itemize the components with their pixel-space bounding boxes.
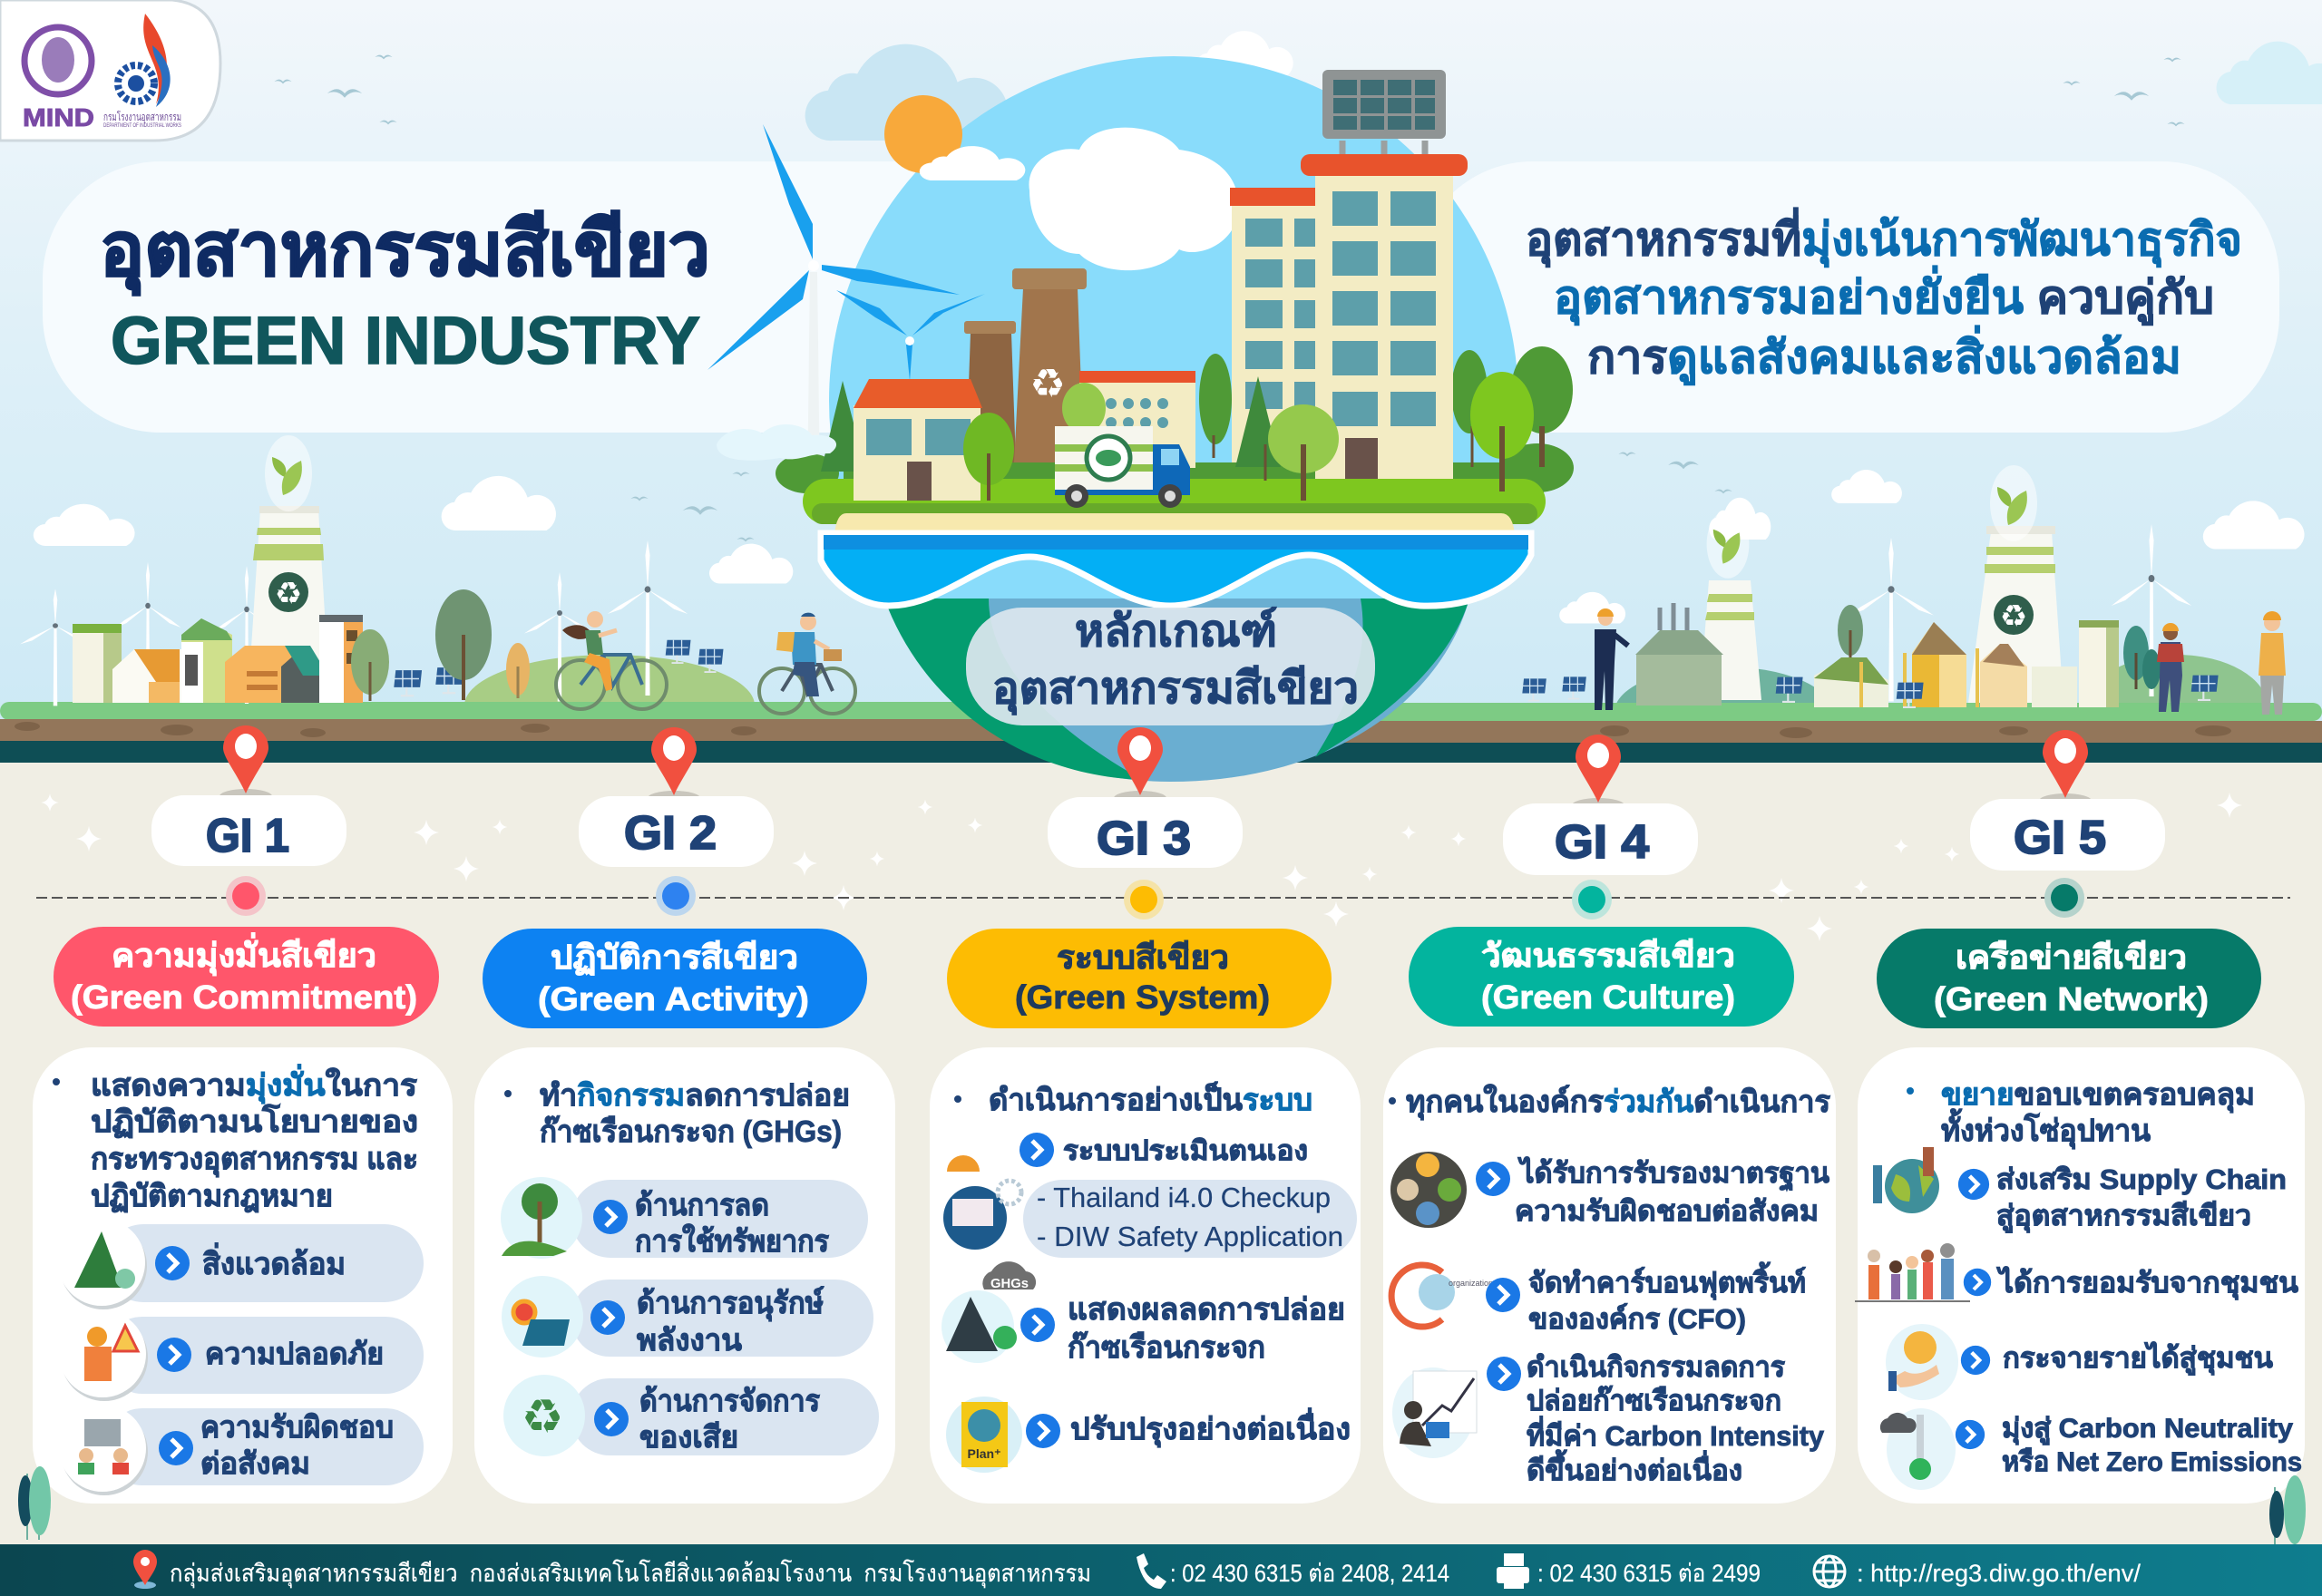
worker woman — [2157, 623, 2184, 712]
right cooling tower: ♻ — [2000, 598, 2027, 635]
right town illustration — [1522, 465, 2286, 715]
row: supply chain: สู่อุตสาหกรรมสีเขียว — [1996, 1200, 2251, 1233]
trees foreground — [963, 372, 1542, 501]
decorative tree right — [2269, 1475, 2306, 1549]
header: Green System — [947, 929, 1332, 1028]
department name — [103, 111, 181, 129]
department name: DEPARTMENT OF INDUSTRIAL WORKS — [103, 123, 181, 129]
wind turbine large — [707, 124, 960, 490]
globe bottom earth — [884, 598, 1469, 782]
title panel pill — [43, 161, 1040, 433]
row: energy conservation: พลังงาน — [637, 1323, 742, 1357]
row: income distribution: กระจายรายได้สู่ชุมชน — [2003, 1341, 2273, 1376]
GI 5 intro text: ทั้งห่วงโซ่อุปทาน — [1941, 1108, 2151, 1150]
row: waste management: ของเสีย — [639, 1420, 738, 1454]
row: GHG reduction results: แสดงผลลดการปล่อย — [1068, 1292, 1345, 1326]
title heading — [100, 209, 710, 378]
description text: อุตสาหกรรมที่มุ่งเน้นการพัฒนาธุรกิจ — [1526, 208, 2242, 268]
row: supply chain — [1873, 1147, 2287, 1233]
icon: ministry seal — [24, 27, 92, 94]
description text — [1526, 208, 2242, 385]
cyclist woman — [556, 611, 667, 709]
footer bar — [0, 1544, 2322, 1596]
GI label pills — [151, 795, 2165, 875]
row: resource reduction: การใช้ทรัพยากร — [635, 1223, 829, 1258]
panel: GI 5 card — [1855, 1047, 2305, 1504]
header: Green Activity: (Green Activity) — [538, 980, 809, 1017]
worker engineer — [2259, 611, 2286, 715]
GI 1 intro text: ปฏิบัติตามกฎหมาย — [91, 1179, 333, 1212]
row: energy conservation: ด้านการอนุรักษ์ — [637, 1286, 824, 1322]
back trees — [1199, 346, 1573, 444]
sun — [884, 95, 962, 173]
row: safety — [59, 1310, 424, 1401]
header: Green Culture — [1409, 927, 1794, 1027]
header: Green Activity — [483, 929, 867, 1028]
header: Green System: (Green System) — [1015, 978, 1270, 1016]
row: carbon intensity: ดำเนินกิจกรรมลดการ — [1527, 1351, 1785, 1383]
header: Green Commitment — [54, 927, 439, 1027]
tall building with solar panel — [1301, 70, 1468, 493]
row: carbon intensity: ปล่อยก๊าซเรือนกระจก — [1527, 1385, 1781, 1416]
panel: GI 2 card — [474, 1047, 895, 1504]
logo panel — [0, 0, 220, 141]
row: checkup applications: - DIW Safety Application — [1037, 1221, 1343, 1252]
chimneys — [964, 268, 1087, 462]
engineer — [1595, 608, 1628, 710]
row: resource reduction: ด้านการลด — [635, 1188, 769, 1221]
row: carbon intensity: ที่มีค่า Carbon Intensity — [1527, 1416, 1825, 1452]
icon: fax — [1497, 1553, 1529, 1589]
row: supply chain: ส่งเสริม Supply Chain — [1996, 1163, 2287, 1195]
decorative tree left — [18, 1466, 51, 1540]
cooling tower — [248, 506, 330, 703]
GI label pills: GI 3 — [1097, 813, 1191, 865]
row: CSR standard — [1390, 1152, 1829, 1228]
left town illustration — [20, 435, 855, 714]
center principle heading: อุตสาหกรรมสีเขียว — [992, 665, 1359, 715]
island grass — [803, 479, 1546, 524]
GI 4 intro text: ทุกคนในองค์กรร่วมกันดำเนินการ — [1406, 1084, 1830, 1121]
wind turbine small — [836, 290, 985, 381]
GI 3 intro text: ดำเนินการอย่างเป็นระบบ — [989, 1081, 1312, 1116]
chimneys: ♻ — [1029, 361, 1066, 407]
row: continuous improvement: Plan⁺ — [968, 1446, 1000, 1461]
row: carbon neutrality: มุ่งสู่ Carbon Neutrality — [2002, 1414, 2293, 1445]
row: environment: สิ่งแวดล้อม — [202, 1242, 346, 1280]
row: self assessment — [947, 1133, 1308, 1172]
GI 2 intro text: ก๊าซเรือนกระจก (GHGs) — [540, 1114, 842, 1148]
row: carbon footprint — [1391, 1261, 1806, 1335]
header: Green System: ระบบสีเขียว — [1057, 939, 1229, 976]
sparkles — [41, 793, 2242, 941]
row: resource reduction — [501, 1177, 868, 1259]
panel: GI 4 card — [1383, 1047, 1836, 1504]
row: waste management — [503, 1375, 879, 1456]
MIND wordmark: MIND — [23, 103, 94, 131]
row: environment — [58, 1219, 424, 1309]
row: carbon intensity — [1392, 1351, 1825, 1486]
GI 1 intro text: ปฏิบัติตามนโยบายของ — [91, 1104, 418, 1138]
row: continuous improvement: ปรับปรุงอย่างต่อเนื่อง — [1070, 1407, 1351, 1448]
GI 5 intro text: ขยายขอบเขตครอบคลุม — [1941, 1077, 2255, 1114]
header: Green Activity: ปฏิบัติการสีเขียว — [551, 939, 798, 976]
icon: DIW flame logo — [118, 14, 171, 107]
header: Green Network: เครือข่ายสีเขียว — [1956, 939, 2187, 976]
header: Green Culture: วัฒนธรรมสีเขียว — [1481, 937, 1735, 974]
sky background — [0, 0, 2322, 744]
right cooling tower — [1968, 526, 2063, 703]
footer address: กลุ่มส่งเสริมอุตสาหกรรมสีเขียว กองส่งเสริมเทคโนโลยีสิ่งแวดล้อมโรงงาน กรมโรงงานอุตสาหกรรม — [170, 1556, 1091, 1589]
row: energy conservation — [502, 1276, 873, 1358]
grass hedge ends — [776, 443, 1574, 499]
hills behind ground — [464, 655, 2268, 760]
center principle heading: หลักเกณฑ์ — [1075, 607, 1277, 656]
header: Green Culture: (Green Culture) — [1481, 978, 1735, 1016]
GI 2 intro text: ทำกิจกรรมลดการปล่อย — [540, 1078, 850, 1112]
GI label pills: GI 4 — [1555, 816, 1649, 869]
title heading: GREEN INDUSTRY — [111, 303, 700, 378]
second building — [1230, 188, 1315, 468]
GI 1 intro text: แสดงความ มุ่งมั่นในการ — [91, 1064, 417, 1105]
cyclist man — [759, 613, 855, 714]
center principle pill — [966, 608, 1375, 725]
fax number: : 02 430 6315 ต่อ 2499 — [1537, 1560, 1761, 1587]
left house — [854, 379, 982, 501]
header: Green Network — [1877, 929, 2261, 1028]
panel: GI 3 card — [930, 1047, 1361, 1504]
department name: กรมโรงงานอุตสาหกรรม — [103, 111, 181, 124]
beige lower background — [0, 760, 2322, 1549]
row: carbon neutrality: หรือ Net Zero Emissions — [2002, 1447, 2302, 1477]
GI label pills: GI 5 — [2014, 812, 2106, 864]
central globe illustration — [707, 56, 1574, 782]
website: : http://reg3.diw.go.th/env/ — [1857, 1560, 2141, 1587]
row: checkup applications: - Thailand i4.0 Checkup — [1037, 1182, 1331, 1213]
row: continuous improvement — [946, 1396, 1351, 1473]
background clouds and birds — [34, 31, 2322, 624]
description text: การดูแลสังคมและสิ่งแวดล้อม — [1587, 326, 2181, 385]
row: CSR standard: ได้รับการรับรองมาตรฐาน — [1517, 1156, 1829, 1192]
row: waste management: ♻ — [522, 1390, 563, 1445]
row: GHG reduction results: ก๊าซเรือนกระจก — [1068, 1330, 1265, 1364]
row: social responsibility — [59, 1405, 424, 1495]
GI label pills: GI 2 — [624, 807, 717, 860]
row: social responsibility: ต่อสังคม — [200, 1446, 310, 1480]
row: income distribution — [1886, 1324, 2273, 1400]
row: self assessment: ระบบประเมินตนเอง — [1063, 1136, 1308, 1166]
row: GHG reduction results — [941, 1261, 1345, 1364]
row: community acceptance: ได้การยอมรับจากชุมชน — [1996, 1266, 2298, 1300]
panel: GI 1 card — [33, 1047, 453, 1504]
left ground strip — [0, 702, 1179, 763]
GI 2 intro text — [504, 1078, 850, 1148]
beach — [834, 513, 1515, 535]
header: Green Network: (Green Network) — [1934, 980, 2209, 1017]
row: social responsibility: ความรับผิดชอบ — [200, 1410, 394, 1444]
description panel pill — [1415, 161, 2279, 433]
truck — [1055, 426, 1190, 508]
clouds on globe — [920, 146, 1025, 180]
GI label pills: GI 1 — [206, 810, 289, 862]
title heading: อุตสาหกรรมสีเขียว — [100, 209, 710, 296]
cooling tower: ♻ — [275, 576, 302, 612]
header: Green Commitment: (Green Commitment) — [71, 978, 417, 1016]
dashed timeline — [36, 897, 2290, 899]
left fir tree and right fir tree — [821, 376, 1281, 472]
row: carbon footprint: จัดทำคาร์บอนฟุตพริ้นท์ — [1528, 1261, 1806, 1300]
row: carbon footprint: ขององค์กร (CFO) — [1528, 1303, 1746, 1335]
row: community acceptance — [1855, 1243, 2298, 1301]
description text: อุตสาหกรรมอย่างยั่งยืน ควบคู่กับ — [1554, 266, 2214, 326]
center principle heading — [992, 607, 1359, 715]
icon: location pin — [133, 1550, 157, 1589]
GI 5 intro text — [1907, 1077, 2255, 1150]
icon: globe — [1814, 1556, 1845, 1587]
location pins — [220, 725, 2092, 813]
right ground strip — [1179, 703, 2322, 763]
row: safety: ความปลอดภัย — [205, 1337, 384, 1370]
phone number: : 02 430 6315 ต่อ 2408, 2414 — [1170, 1560, 1449, 1587]
GI 1 intro text — [53, 1064, 418, 1212]
water darker top band — [824, 535, 1528, 550]
row: checkup applications — [943, 1180, 1357, 1258]
row: carbon neutrality — [1880, 1408, 2302, 1490]
icon: phone — [1137, 1553, 1166, 1589]
back factory — [1079, 371, 1195, 468]
timeline dots — [226, 876, 2084, 920]
row: GHG reduction results: GHGs — [990, 1276, 1029, 1291]
header: Green Commitment: ความมุ่งมั่นสีเขียว — [112, 932, 376, 977]
water — [821, 533, 1531, 606]
GI 1 intro text: กระทรวงอุตสาหกรรม และ — [91, 1142, 418, 1178]
row: waste management: ด้านการจัดการ — [639, 1384, 820, 1417]
row: carbon intensity: ดีขึ้นอย่างต่อเนื่อง — [1527, 1449, 1742, 1486]
globe sky — [829, 56, 1518, 745]
cloud at left of island — [717, 424, 836, 461]
row: carbon footprint: organization — [1449, 1279, 1493, 1288]
row: CSR standard: ความรับผิดชอบต่อสังคม — [1515, 1195, 1819, 1227]
